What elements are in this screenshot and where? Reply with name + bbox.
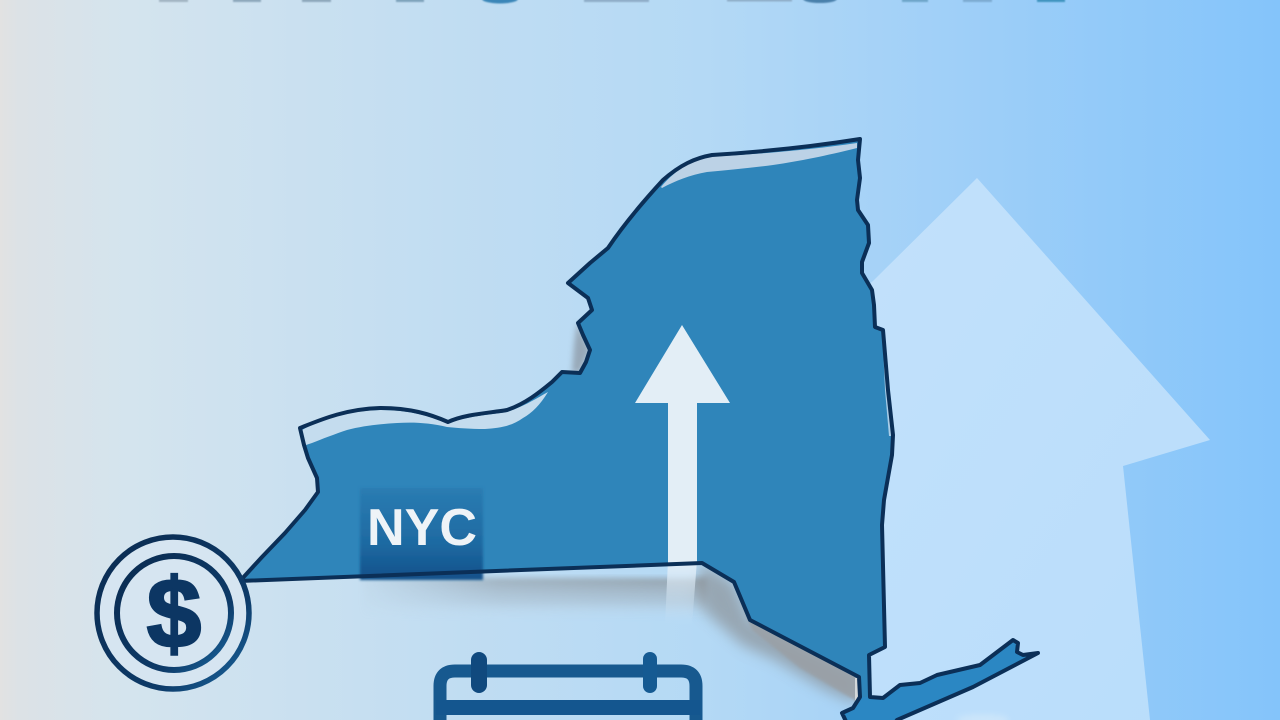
coin disc	[97, 537, 249, 689]
calendar frame	[440, 671, 696, 720]
eastern edge highlight	[883, 345, 892, 436]
Hudson valley notch shadow	[572, 322, 590, 373]
cropped title letter bottoms	[159, 0, 1065, 4]
northern highlight crescent	[661, 143, 857, 188]
drop shadow under southern border	[362, 563, 860, 704]
NYC dark patch	[360, 488, 483, 580]
upward arrow	[635, 325, 730, 563]
state shape	[240, 139, 1038, 720]
calendar right ring	[643, 652, 657, 693]
coin inner ring	[117, 556, 231, 670]
New York State map	[240, 139, 1038, 720]
calendar header bar	[436, 700, 700, 715]
soft glow near bottom edge	[957, 714, 1009, 720]
icon: dollar coin	[97, 537, 249, 689]
Long Island fill	[842, 640, 1038, 720]
NYC label block	[360, 488, 483, 580]
NYC text: NYC	[367, 499, 477, 557]
house silhouette	[862, 178, 1210, 720]
western highlight crescent	[302, 392, 548, 445]
icon: calendar	[436, 652, 700, 720]
arrow shaft extending below the state border	[665, 560, 697, 625]
calendar left ring	[471, 652, 487, 693]
coin outer ring	[97, 537, 249, 689]
state outline	[240, 139, 1038, 720]
dollar sign: $	[147, 558, 201, 668]
